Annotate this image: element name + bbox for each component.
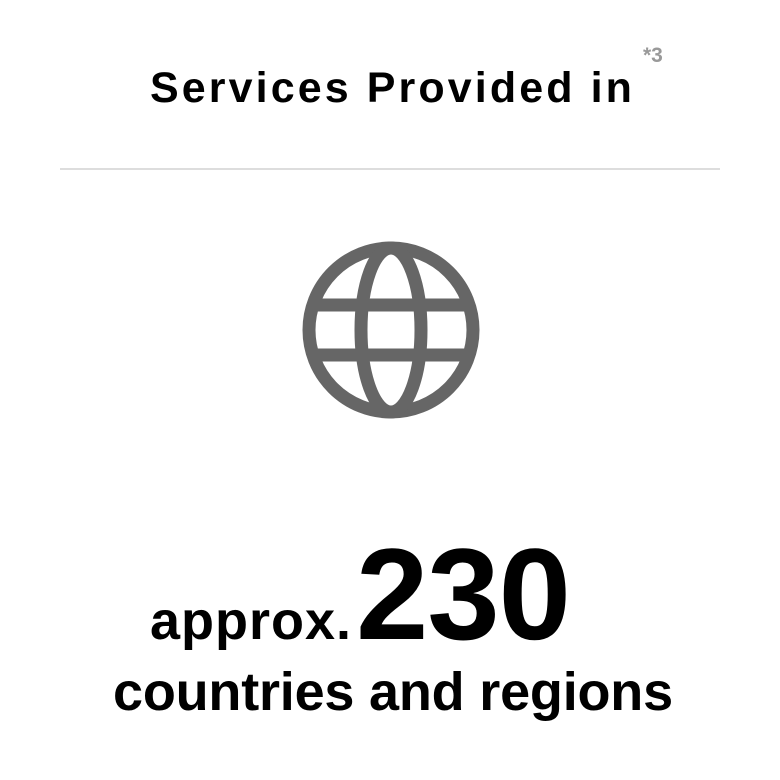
stat: approx. 230: approx.230 [150, 521, 570, 667]
icon: globe [302, 242, 480, 418]
title: Services Provided in [150, 64, 635, 112]
footnote mark: *3 [643, 44, 663, 67]
label: countries and regions: countries and regions [113, 662, 673, 722]
